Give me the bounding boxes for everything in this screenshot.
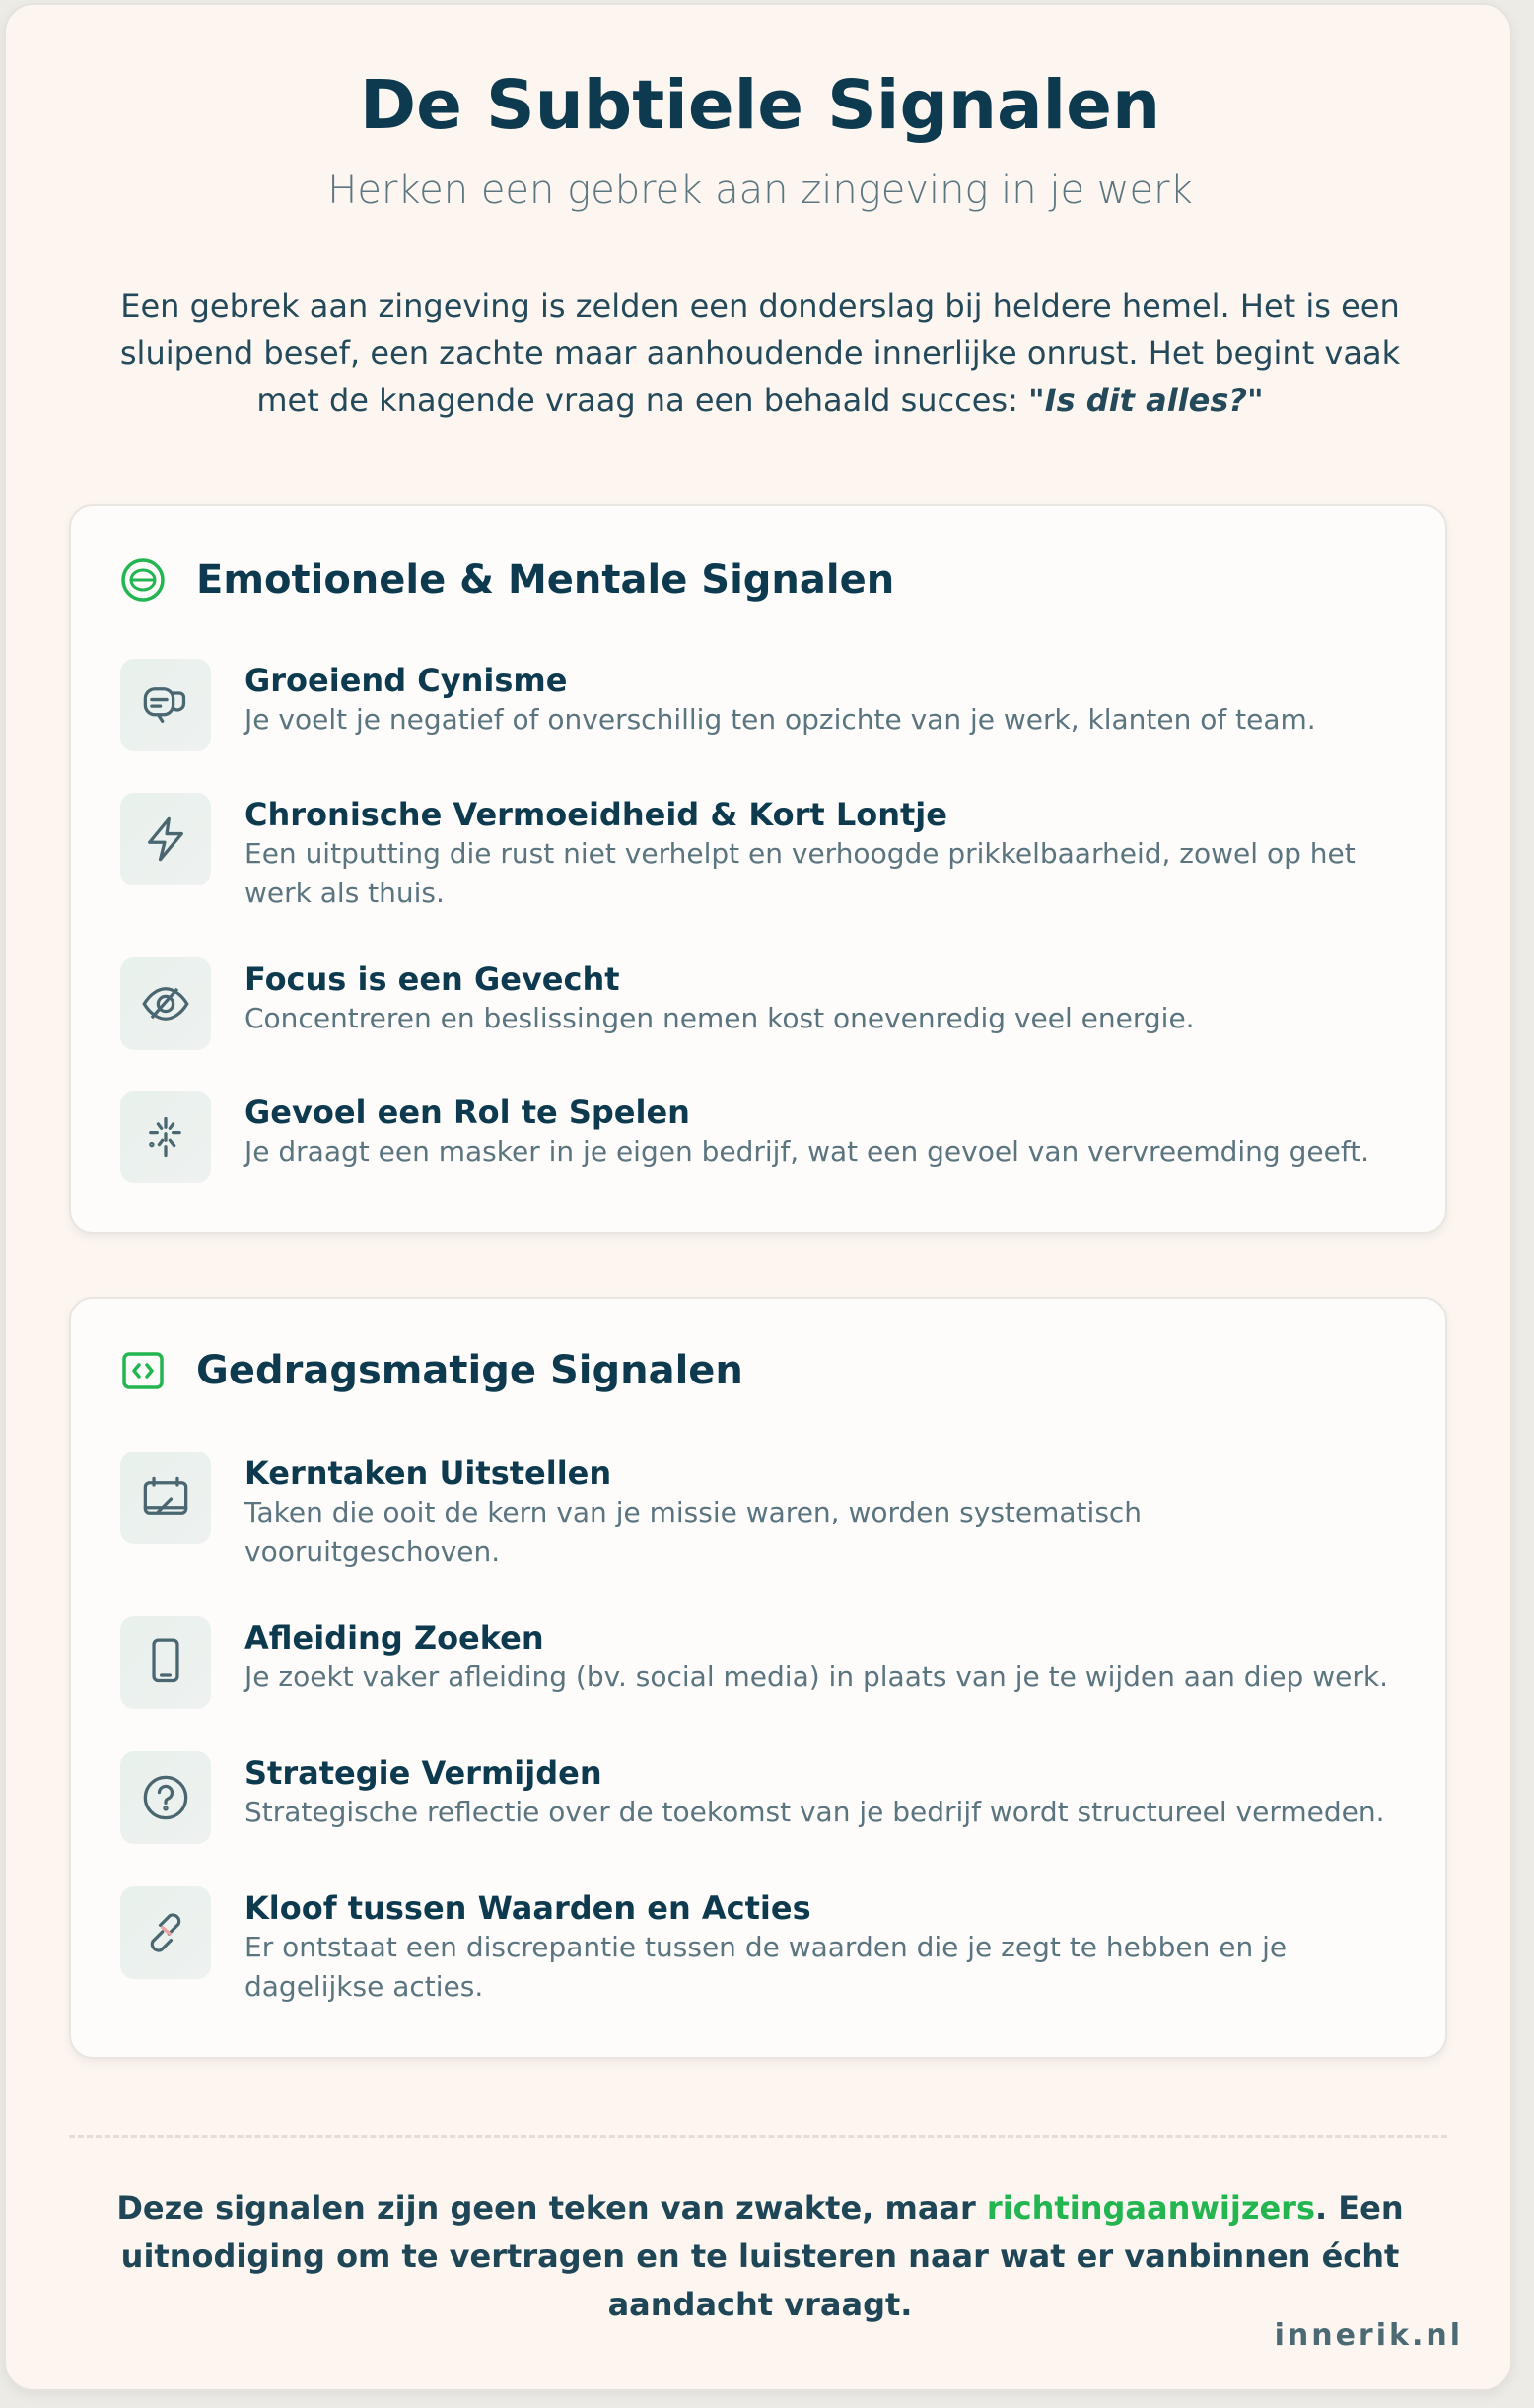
item: rol spelen: Gevoel een Rol te Spelen bbox=[244, 1094, 690, 1131]
item: afleiding bbox=[120, 1616, 1388, 1709]
item: strategie bbox=[120, 1751, 1384, 1844]
item: vermoeidheid: Een uitputting die rust niet verhelpt en verhoogde prikkelbaarheid, zowel op het werk als thuis. bbox=[244, 837, 1356, 909]
panel: emotionele signalen bbox=[69, 504, 1447, 1234]
panel: gedragsmatige signalen bbox=[69, 1297, 1447, 2059]
title: De Subtiele Signalen bbox=[360, 66, 1160, 145]
item: afleiding: Je zoekt vaker afleiding (bv. social media) in plaats van je te wijden aan diep werk. bbox=[244, 1661, 1388, 1693]
heading: Emotionele & Mentale Signalen bbox=[196, 557, 894, 602]
item: kerntaken: Kerntaken Uitstellen bbox=[244, 1454, 611, 1492]
footer message: Deze signalen zijn geen teken van zwakte, maar richtingaanwijzers. Een uitnodiging om te vertragen en te luisteren naar wat er vanbinnen écht aandacht vraagt. bbox=[116, 2189, 1404, 2323]
item: kerntaken bbox=[120, 1452, 1142, 1568]
item: kerntaken: Taken die ooit de kern van je missie waren, worden systematisch vooruitgeschoven. bbox=[244, 1496, 1142, 1568]
icon: green circle bbox=[121, 558, 165, 602]
item: vermoeidheid bbox=[120, 793, 1356, 909]
item: kloof: Er ontstaat een discrepantie tussen de waarden die je zegt te hebben en je dagelijkse acties. bbox=[244, 1931, 1287, 2003]
item: cynisme bbox=[120, 659, 1316, 751]
intro text: Een gebrek aan zingeving is zelden een donderslag bij heldere hemel. Het is een sluipend besef, een zachte maar aanhoudende innerlijke onrust. Het begint vaak met de knagende vraag na een behaald succes: "Is dit alles?" bbox=[120, 287, 1400, 419]
item: rol spelen bbox=[120, 1091, 1369, 1183]
item: vermoeidheid: Chronische Vermoeidheid & Kort Lontje bbox=[244, 796, 947, 833]
item: focus: Focus is een Gevecht bbox=[244, 960, 620, 998]
item: kloof: Kloof tussen Waarden en Acties bbox=[244, 1889, 811, 1927]
item: focus bbox=[120, 957, 1195, 1050]
heading: Gedragsmatige Signalen bbox=[196, 1348, 743, 1393]
icon: code brackets bbox=[122, 1352, 164, 1389]
item: cynisme: Je voelt je negatief of onverschillig ten opzichte van je werk, klanten of team. bbox=[244, 703, 1316, 736]
item: kloof bbox=[120, 1886, 1287, 2003]
item: afleiding: Afleiding Zoeken bbox=[244, 1619, 544, 1657]
item: cynisme: Groeiend Cynisme bbox=[244, 662, 567, 699]
subtitle: Herken een gebrek aan zingeving in je werk bbox=[327, 168, 1193, 213]
item: strategie: Strategie Vermijden bbox=[244, 1754, 602, 1792]
brand: innerik.nl bbox=[1275, 2318, 1463, 2353]
item: rol spelen: Je draagt een masker in je eigen bedrijf, wat een gevoel van vervreemding geeft. bbox=[244, 1135, 1369, 1168]
item: strategie: Strategische reflectie over de toekomst van je bedrijf wordt structureel vermeden. bbox=[244, 1796, 1384, 1828]
item: focus: Concentreren en beslissingen nemen kost onevenredig veel energie. bbox=[244, 1002, 1195, 1034]
